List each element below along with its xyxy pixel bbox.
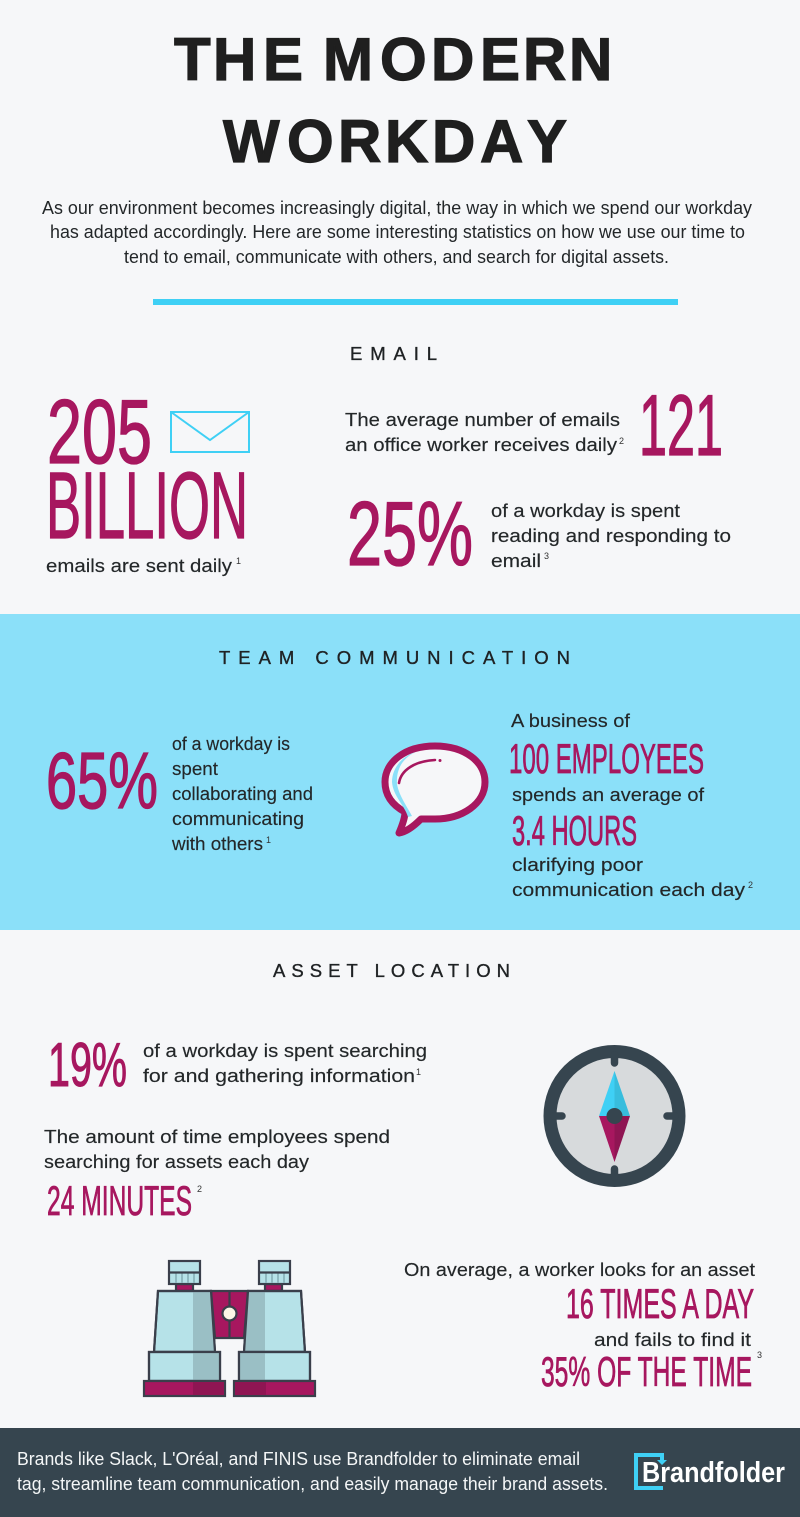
stat: 205 billion emails: BILLION (46, 453, 248, 559)
icon: binoculars (144, 1261, 315, 1396)
stat: 16 times a day, 35 percent: and fails to find it (594, 1329, 751, 1350)
stat: 121 emails received (345, 378, 723, 474)
stat: 65 percent collaborating (46, 733, 313, 854)
icon: compass (550, 1052, 679, 1180)
stat: 25 percent reading email: email (491, 550, 541, 571)
stat: 25 percent reading email: 3 (544, 551, 549, 561)
stat: 25 percent reading email: 25% (347, 484, 473, 585)
stat: 205 billion emails: emails are sent daily (46, 555, 233, 576)
stat: 121 emails received: 121 (639, 378, 723, 474)
stat: 19 percent searching: of a workday is spent searching (143, 1040, 427, 1061)
stat: 100 employees 3.4 hours: clarifying poor (512, 854, 643, 875)
stat: 16 times a day, 35 percent (404, 1259, 762, 1395)
footer text (17, 1449, 608, 1494)
stat: 65 percent collaborating: with others (171, 833, 263, 854)
footer text: Brands like Slack, L'Oréal, and FINIS use Brandfolder to eliminate email (17, 1449, 580, 1469)
stat: 205 billion emails: 205 (47, 382, 152, 483)
stat: 24 minutes: 24 MINUTES (47, 1177, 192, 1224)
heading divider (153, 299, 678, 305)
stat: 19 percent searching: 19% (48, 1031, 127, 1100)
stat: 25 percent reading email: of a workday is spent (491, 500, 680, 521)
intro text: has adapted accordingly. Here are some interesting statistics on how we use our time to (50, 222, 745, 242)
title (174, 26, 612, 175)
panel: team communication (0, 614, 800, 930)
stat: 25 percent reading email (347, 484, 731, 585)
stat: 19 percent searching (48, 1031, 427, 1100)
stat: 205 billion emails (46, 382, 248, 576)
title: THE MODERN (174, 26, 612, 93)
stat: 65 percent collaborating: communicating (172, 808, 304, 829)
stat: 100 employees 3.4 hours: 3.4 HOURS (512, 807, 637, 854)
stat: 121 emails received: an office worker receives daily (345, 434, 618, 455)
stat: 65 percent collaborating: of a workday is (172, 733, 290, 754)
stat: 100 employees 3.4 hours (509, 710, 753, 900)
stat: 24 minutes (44, 1126, 390, 1224)
title: WORKDAY (223, 108, 567, 175)
icon: envelope (171, 412, 249, 452)
heading: email: EMAIL (350, 343, 437, 364)
stat: 65 percent collaborating: collaborating and (172, 783, 313, 804)
heading: team communication: TEAM COMMUNICATION (219, 647, 570, 668)
stat: 24 minutes: 2 (197, 1184, 202, 1194)
stat: 65 percent collaborating: spent (172, 758, 218, 779)
panel: footer (0, 1428, 800, 1517)
stat: 100 employees 3.4 hours: spends an average of (512, 784, 705, 805)
stat: 100 employees 3.4 hours: communication each day (512, 879, 746, 900)
stat: 19 percent searching: for and gathering information (143, 1065, 415, 1086)
intro text: As our environment becomes increasingly digital, the way in which we spend our workday (42, 198, 752, 218)
stat: 19 percent searching: 1 (416, 1067, 421, 1077)
stat: 25 percent reading email: reading and responding to (491, 525, 731, 546)
footer text: tag, streamline team communication, and easily manage their brand assets. (17, 1474, 608, 1494)
stat: 205 billion emails: 1 (236, 556, 241, 566)
stat: 100 employees 3.4 hours: A business of (511, 710, 631, 731)
stat: 65 percent collaborating: 1 (266, 835, 271, 845)
stat: 121 emails received: The average number of emails (345, 409, 620, 430)
stat: 16 times a day, 35 percent: On average, a worker looks for an asset (404, 1259, 755, 1280)
stat: 121 emails received: 2 (619, 436, 624, 446)
intro text: tend to email, communicate with others, and search for digital assets. (124, 247, 669, 267)
stat: 16 times a day, 35 percent: 3 (757, 1350, 762, 1360)
icon: speech bubble (385, 746, 485, 833)
stat: 24 minutes: The amount of time employees spend (44, 1126, 390, 1147)
stat: 65 percent collaborating: 65% (46, 736, 158, 825)
stat: 100 employees 3.4 hours: 2 (748, 880, 753, 890)
intro text (42, 198, 752, 267)
heading: asset location: ASSET LOCATION (273, 960, 510, 981)
stat: 24 minutes: searching for assets each day (44, 1151, 310, 1172)
